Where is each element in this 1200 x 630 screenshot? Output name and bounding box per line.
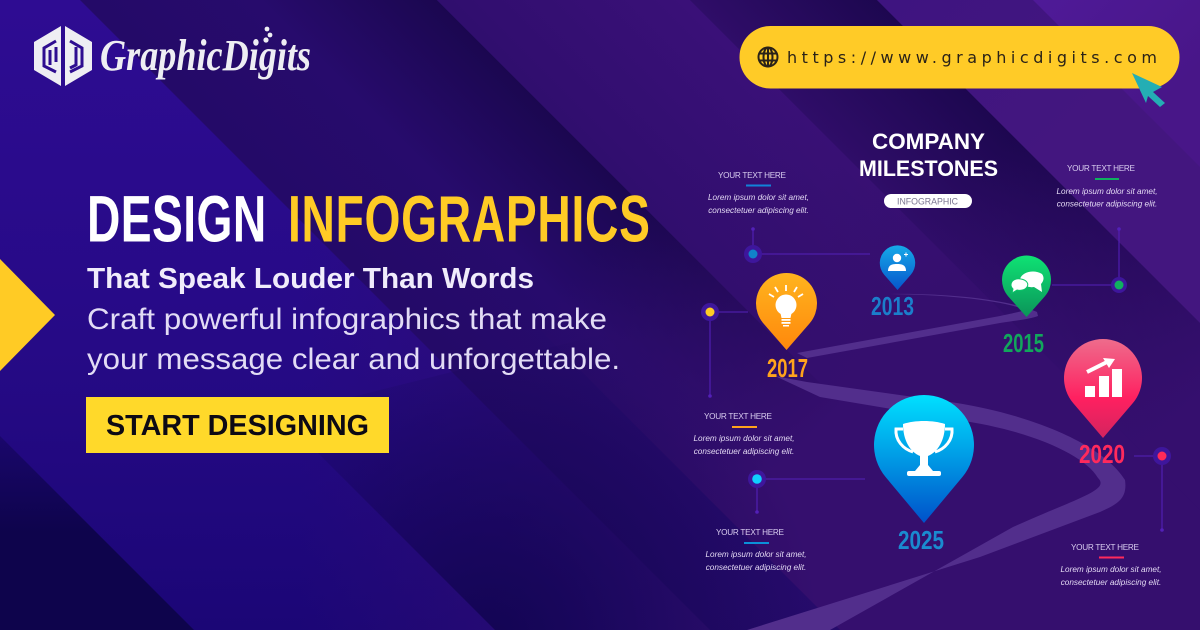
text block: YOUR TEXT HERE xyxy=(718,171,787,180)
pin xyxy=(874,395,974,523)
year: 2013 xyxy=(871,291,914,321)
headline xyxy=(87,182,650,257)
infographic title: MILESTONES xyxy=(859,156,998,181)
text block xyxy=(1056,164,1158,208)
icon: cursor xyxy=(1132,73,1165,107)
subheading: That Speak Louder Than Words xyxy=(87,263,534,295)
connector xyxy=(744,227,870,263)
text block xyxy=(1060,543,1162,587)
text block xyxy=(693,412,795,456)
text block: consectetuer adipiscing elit. xyxy=(1057,200,1157,208)
milestone 2017 xyxy=(693,273,817,456)
milestone 2013 xyxy=(708,171,915,321)
text block: consectetuer adipiscing elit. xyxy=(708,206,809,215)
text block: YOUR TEXT HERE xyxy=(1067,164,1136,173)
text block: consectetuer adipiscing elit. xyxy=(706,563,806,572)
milestone 2025 xyxy=(705,395,974,572)
icon: bulb xyxy=(769,285,803,326)
text block: consectetuer adipiscing elit. xyxy=(1061,578,1161,587)
connector xyxy=(748,470,865,514)
url pill xyxy=(740,26,1180,88)
arrow: left yellow marker xyxy=(0,259,55,371)
pin xyxy=(756,273,817,350)
logo xyxy=(34,26,311,86)
headline: INFOGRAPHICS xyxy=(288,182,650,257)
text block xyxy=(705,528,807,572)
icon: globe xyxy=(758,48,778,66)
text block: Lorem ipsum dolor sit amet, xyxy=(1056,187,1158,196)
connector xyxy=(701,303,748,398)
button: START DESIGNING xyxy=(106,410,369,442)
year: 2015 xyxy=(1003,328,1044,358)
button xyxy=(86,397,389,453)
infographic pill xyxy=(884,194,972,208)
connector xyxy=(1134,447,1171,532)
headline: DESIGN xyxy=(87,182,266,257)
text block: Lorem ipsum dolor sit amet, xyxy=(708,193,809,202)
icon: trophy xyxy=(896,421,952,476)
pin xyxy=(1064,339,1142,438)
year: 2020 xyxy=(1079,439,1125,469)
infographic title: COMPANY xyxy=(872,129,985,154)
text block xyxy=(708,171,809,215)
logo mark xyxy=(34,26,92,86)
road xyxy=(747,294,1125,630)
body text: your message clear and unforgettable. xyxy=(87,343,620,376)
text block: consectetuer adipiscing elit. xyxy=(694,447,794,456)
text block: Lorem ipsum dolor sit amet, xyxy=(705,550,807,559)
icon: user xyxy=(888,252,908,271)
text block: Lorem ipsum dolor sit amet, xyxy=(1060,565,1162,574)
icon: chart xyxy=(1085,358,1122,397)
logo dots xyxy=(263,27,272,43)
body text xyxy=(87,303,620,376)
year: 2017 xyxy=(767,353,808,383)
infographic pill: INFOGRAPHIC xyxy=(897,196,958,206)
logo wordmark: GraphicDigits xyxy=(100,31,311,80)
milestone 2015 xyxy=(1002,164,1158,358)
text block: Lorem ipsum dolor sit amet, xyxy=(693,434,795,443)
infographic title xyxy=(859,129,998,181)
connector xyxy=(1052,227,1127,293)
body text: Craft powerful infographics that make xyxy=(87,303,607,336)
year: 2025 xyxy=(898,525,944,555)
url text: https://www.graphicdigits.com xyxy=(787,48,1157,67)
icon: chat xyxy=(1011,272,1044,293)
text block: YOUR TEXT HERE xyxy=(704,412,773,421)
text block: YOUR TEXT HERE xyxy=(1071,543,1140,552)
pin xyxy=(880,245,915,290)
text block: YOUR TEXT HERE xyxy=(716,528,785,537)
pin xyxy=(1002,256,1051,317)
milestone 2020 xyxy=(1060,339,1171,587)
